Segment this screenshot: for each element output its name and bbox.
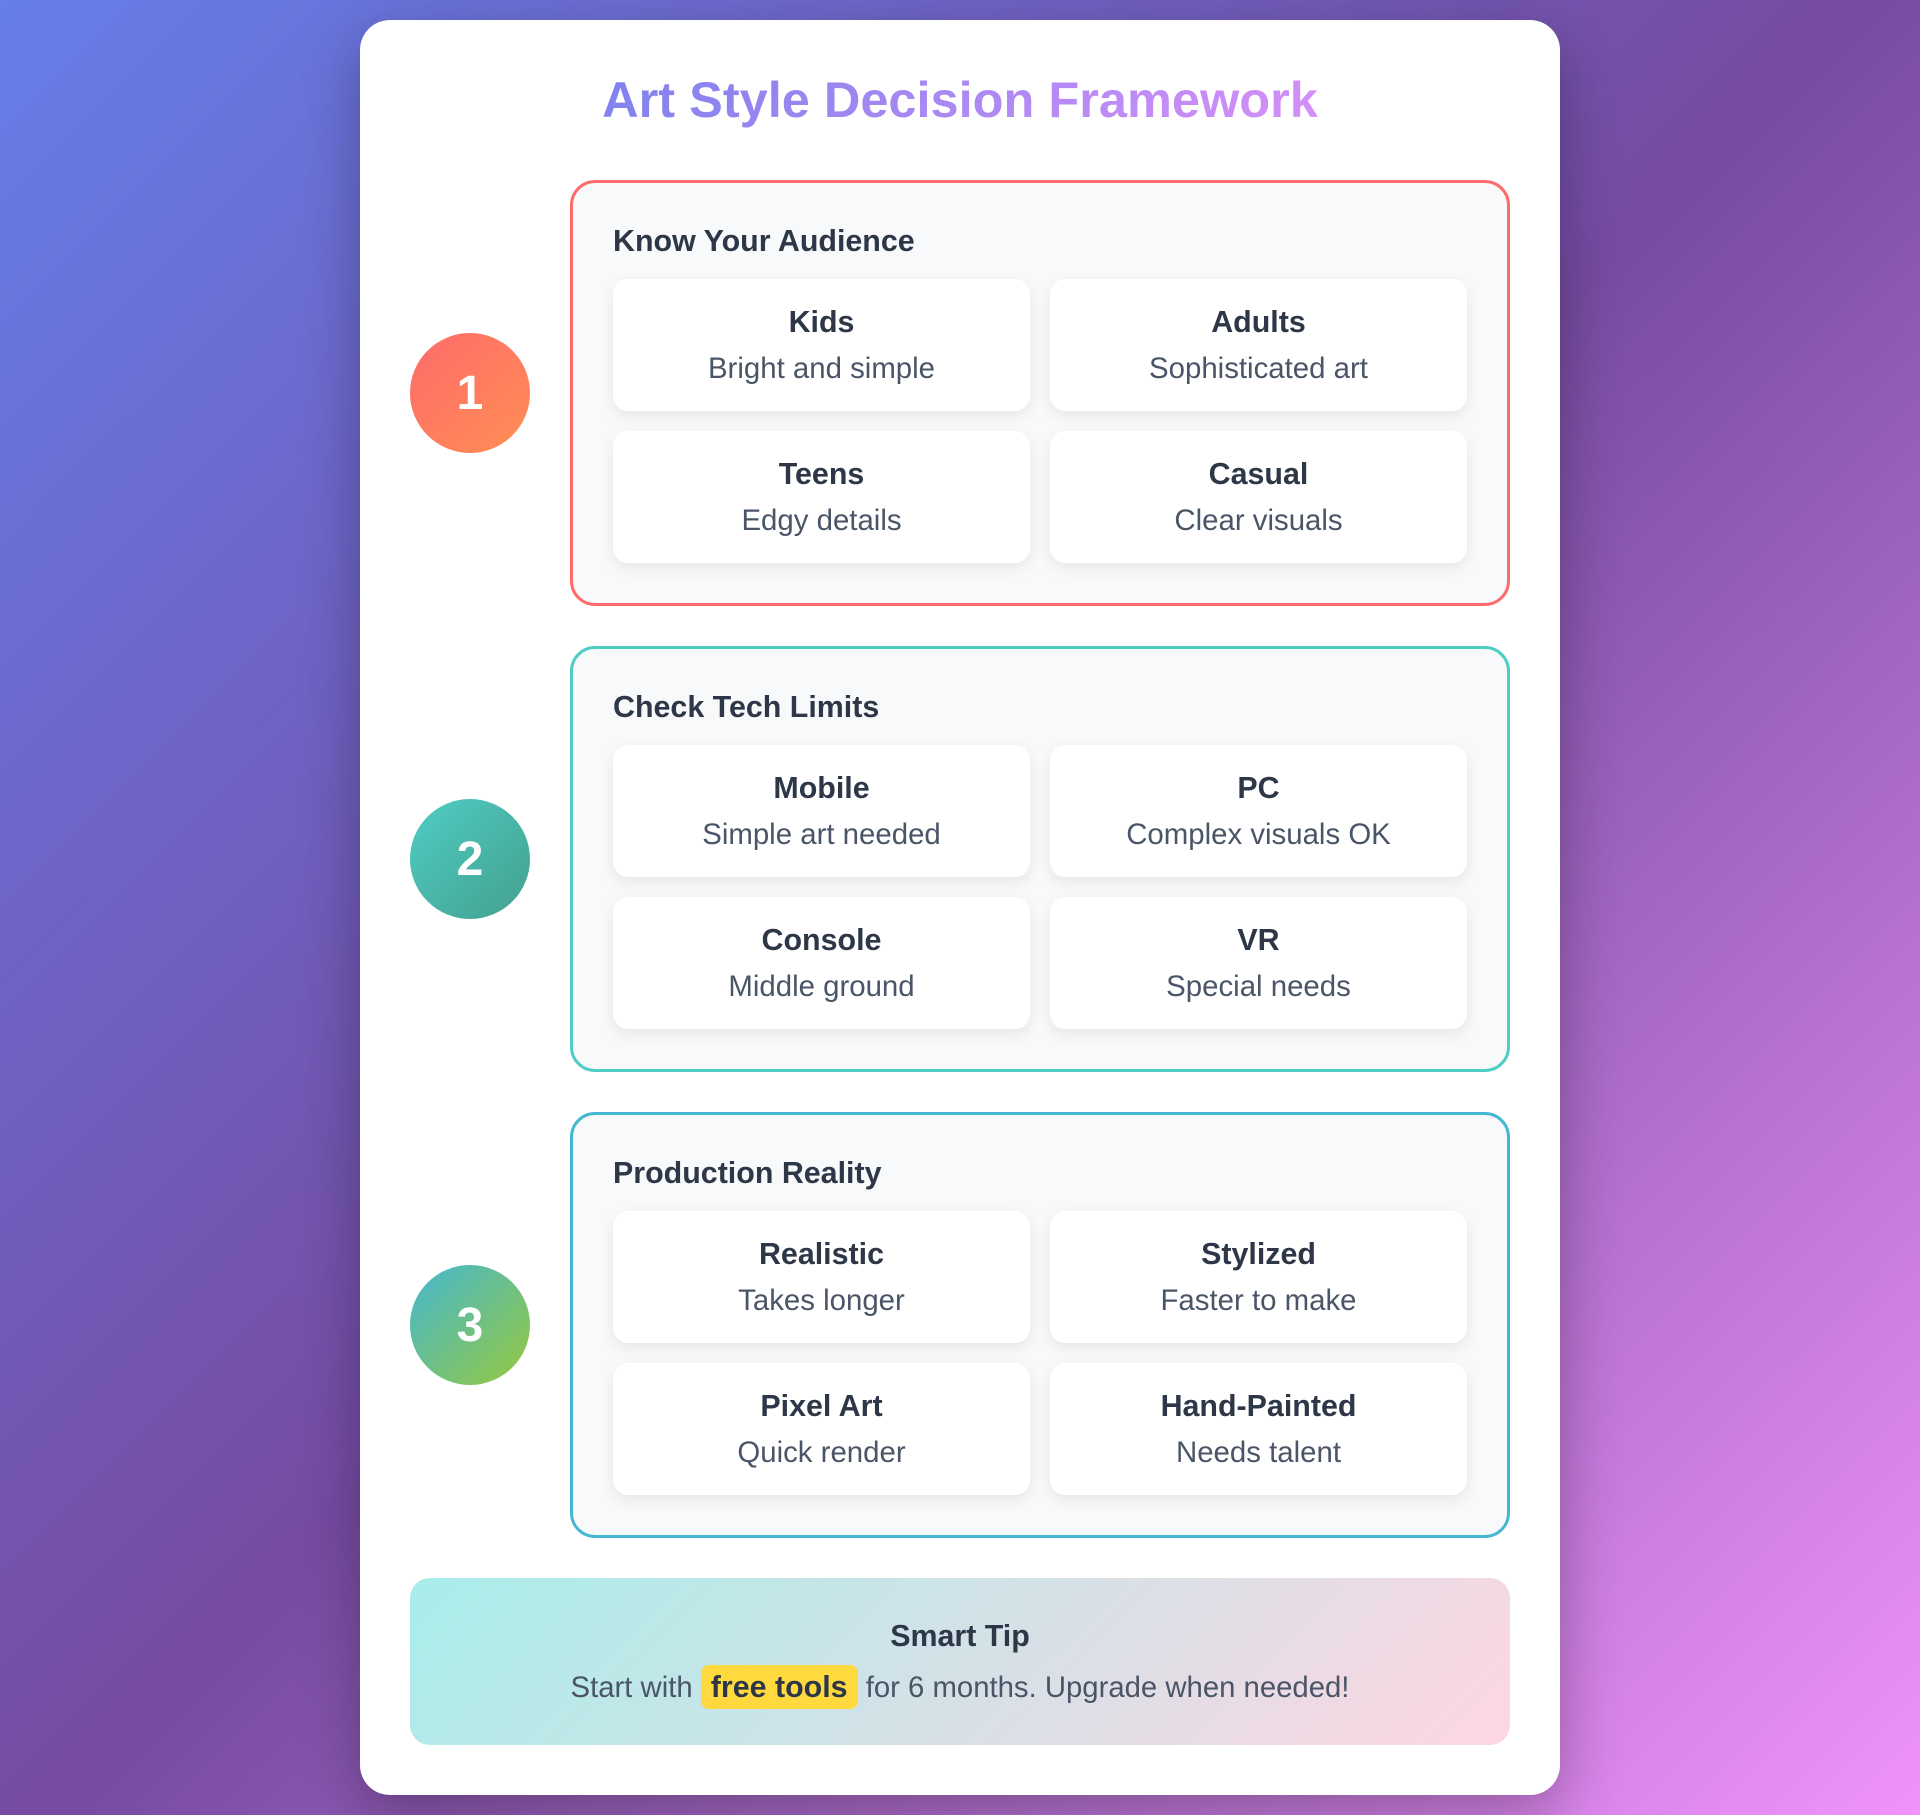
step 1 number circle: 1 — [457, 367, 483, 420]
item: stylized — [1050, 1211, 1467, 1343]
heading: check tech limits: Check Tech Limits — [613, 690, 879, 724]
title: Art Style Decision Framework — [602, 71, 1318, 128]
step 2 number circle — [410, 799, 530, 919]
item: kids: Bright and simple — [708, 352, 935, 384]
step 1 number circle — [410, 333, 530, 453]
item: mobile — [613, 745, 1030, 877]
main card — [360, 20, 1560, 1795]
item: pc: PC — [1237, 771, 1280, 805]
item: pixel art: Quick render — [737, 1436, 906, 1468]
item: kids — [613, 279, 1030, 411]
heading: production reality: Production Reality — [613, 1156, 882, 1190]
item: console: Console — [762, 923, 881, 957]
item: teens — [613, 431, 1030, 563]
item: stylized: Faster to make — [1160, 1284, 1356, 1316]
item: casual: Clear visuals — [1174, 504, 1343, 536]
item: mobile: Mobile — [773, 771, 870, 805]
item: pixel art: Pixel Art — [760, 1389, 883, 1423]
item: hand-painted — [1050, 1363, 1467, 1495]
item: realistic: Realistic — [759, 1237, 884, 1271]
tip title: Smart Tip — [890, 1619, 1030, 1653]
item: vr: VR — [1237, 923, 1280, 957]
item: hand-painted: Hand-Painted — [1161, 1389, 1356, 1423]
item: adults: Adults — [1211, 305, 1306, 339]
tip text: Start with free tools for 6 months. Upgrade when needed! — [571, 1670, 1349, 1704]
item: kids: Kids — [789, 305, 854, 339]
panel: check tech limits — [570, 646, 1510, 1072]
item: adults: Sophisticated art — [1149, 352, 1368, 384]
item: pc: Complex visuals OK — [1126, 818, 1391, 850]
item: realistic — [613, 1211, 1030, 1343]
item: pixel art — [613, 1363, 1030, 1495]
item: casual: Casual — [1209, 457, 1308, 491]
panel: production reality — [570, 1112, 1510, 1538]
item: teens: Teens — [779, 457, 864, 491]
panel: know your audience — [570, 180, 1510, 606]
item: teens: Edgy details — [741, 504, 902, 536]
item: adults — [1050, 279, 1467, 411]
item: mobile: Simple art needed — [702, 818, 941, 850]
item: realistic: Takes longer — [738, 1284, 905, 1316]
item: console — [613, 897, 1030, 1029]
item: hand-painted: Needs talent — [1176, 1436, 1341, 1468]
heading: know your audience: Know Your Audience — [613, 224, 915, 258]
step 3 number circle: 3 — [457, 1299, 483, 1352]
item: vr — [1050, 897, 1467, 1029]
item: casual — [1050, 431, 1467, 563]
item: pc — [1050, 745, 1467, 877]
item: stylized: Stylized — [1201, 1237, 1316, 1271]
step 2 number circle: 2 — [457, 833, 483, 886]
item: console: Middle ground — [728, 970, 915, 1002]
step 3 number circle — [410, 1265, 530, 1385]
item: vr: Special needs — [1166, 970, 1351, 1002]
title — [410, 50, 1510, 150]
callout: smart tip — [410, 1578, 1510, 1745]
